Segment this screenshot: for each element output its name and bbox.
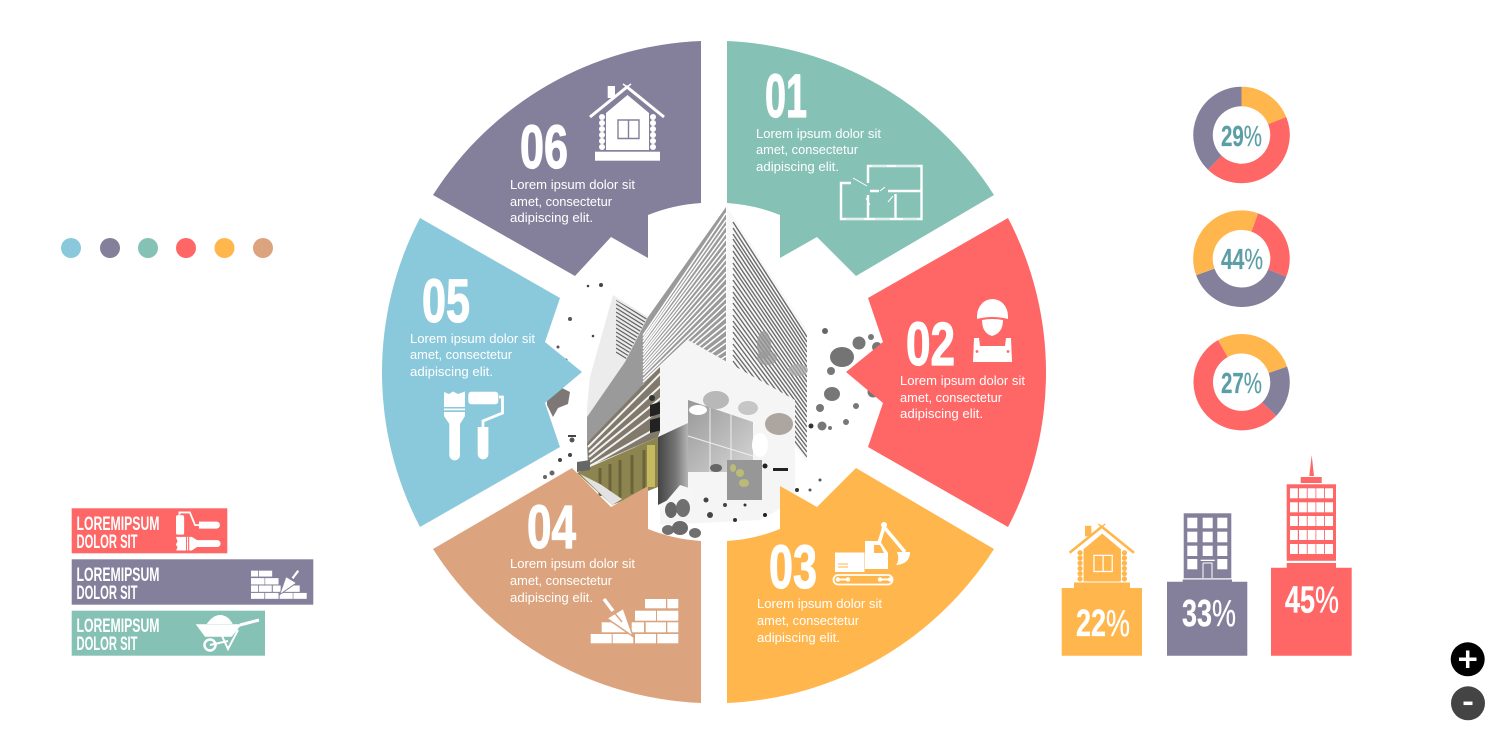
legend: colour dots xyxy=(61,238,273,258)
segment shape xyxy=(727,468,994,703)
value: 45% xyxy=(1285,580,1339,622)
description: adipiscing elit. xyxy=(757,630,840,645)
label text: LOREMIPSUM xyxy=(76,615,160,637)
description: adipiscing elit. xyxy=(900,406,983,421)
label text xyxy=(76,615,160,655)
icon: log house xyxy=(590,84,664,161)
donut chart: 27% xyxy=(1203,344,1280,421)
label bar: coral xyxy=(72,508,227,553)
icon: apartment building xyxy=(1184,513,1231,578)
tower pedestal xyxy=(1271,563,1352,656)
label bar: teal xyxy=(72,611,265,656)
description xyxy=(900,373,1025,421)
zoom in button xyxy=(1451,642,1485,676)
value: 22% xyxy=(1076,603,1130,645)
donut chart: 29% xyxy=(1203,96,1280,173)
label text xyxy=(76,513,160,553)
arcade with yellow glazing xyxy=(577,437,658,505)
icon: construction worker xyxy=(973,299,1012,362)
number 02: 02 xyxy=(906,310,955,378)
description: adipiscing elit. xyxy=(410,364,493,379)
description: adipiscing elit. xyxy=(756,159,839,174)
description: Lorem ipsum dolor sit xyxy=(510,556,635,571)
description: adipiscing elit. xyxy=(510,210,593,225)
panel: segment 04 xyxy=(433,468,701,703)
description: amet, consectetur xyxy=(757,613,860,628)
number 01: 01 xyxy=(765,62,807,130)
segment shape xyxy=(433,468,701,703)
description xyxy=(510,556,635,605)
balconies xyxy=(587,367,673,467)
description: Lorem ipsum dolor sit xyxy=(900,373,1025,388)
number 04: 04 xyxy=(527,493,576,561)
paint splatter marks xyxy=(543,283,882,538)
description: amet, consectetur xyxy=(756,142,859,157)
segment shape xyxy=(727,41,994,276)
glass block xyxy=(658,340,795,525)
donut chart: 44%: 44% xyxy=(1221,244,1263,276)
icon: bricks and trowel xyxy=(251,571,307,599)
donut chart: 27%: 27% xyxy=(1221,368,1262,400)
label bar: purple xyxy=(72,559,313,605)
description: amet, consectetur xyxy=(900,390,1003,405)
icon: bricks and trowel xyxy=(591,599,678,643)
icon: brush and roller xyxy=(444,392,502,460)
number 05: 05 xyxy=(422,267,470,335)
label text xyxy=(76,564,160,604)
building pedestal xyxy=(1167,580,1247,656)
segment shape xyxy=(382,218,582,527)
donut chart: 44% xyxy=(1203,220,1280,297)
description xyxy=(756,126,881,174)
panel: segment 05 xyxy=(382,218,582,527)
main facade right, white with dark louvres xyxy=(732,222,808,458)
description: adipiscing elit. xyxy=(510,590,593,605)
label text: LOREMIPSUM xyxy=(76,513,160,535)
panel: segment 01 xyxy=(727,41,994,276)
small rear tower xyxy=(587,295,648,417)
label text: DOLOR SIT xyxy=(76,531,138,553)
label text: DOLOR SIT xyxy=(76,633,138,655)
icon: excavator xyxy=(834,522,910,584)
bar: building 33% xyxy=(1167,513,1247,656)
description: Lorem ipsum dolor sit xyxy=(757,596,882,611)
label text: DOLOR SIT xyxy=(76,582,138,604)
value: 33% xyxy=(1182,593,1236,635)
description xyxy=(757,596,882,645)
panel: segment 03 xyxy=(727,468,994,703)
description: amet, consectetur xyxy=(410,347,513,362)
house pedestal xyxy=(1062,582,1142,656)
bar: house 22% xyxy=(1062,524,1142,656)
icon: skyscraper xyxy=(1287,455,1336,561)
donut chart: 29%: 29% xyxy=(1221,121,1262,153)
description: Lorem ipsum dolor sit xyxy=(510,177,635,192)
segment shape xyxy=(846,218,1046,527)
description: Lorem ipsum dolor sit xyxy=(756,126,881,141)
icon: floor plan xyxy=(841,166,922,219)
panel: segment 06 xyxy=(433,41,701,276)
icon: house xyxy=(1070,524,1134,582)
bar: tower 45% xyxy=(1271,455,1352,656)
description xyxy=(510,177,635,225)
label text: LOREMIPSUM xyxy=(76,564,160,586)
description: Lorem ipsum dolor sit xyxy=(410,331,535,346)
description: amet, consectetur xyxy=(510,573,613,588)
number 06: 06 xyxy=(520,113,568,181)
zoom out button xyxy=(1451,686,1485,720)
main facade left, grey with white louvres xyxy=(587,207,726,443)
central building photo with paint splatter xyxy=(543,207,882,538)
number 03: 03 xyxy=(769,533,817,601)
icon: wheelbarrow xyxy=(196,615,259,650)
panel: segment 02 xyxy=(846,218,1046,527)
description: amet, consectetur xyxy=(510,194,613,209)
description xyxy=(410,331,535,379)
icon: roller and brush xyxy=(176,512,221,550)
segment shape xyxy=(433,41,701,276)
